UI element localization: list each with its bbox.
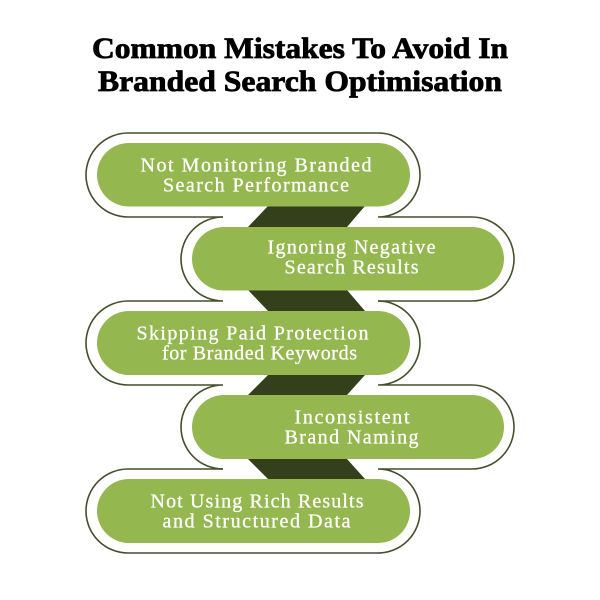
step 1: Not Monitoring Branded (140, 154, 372, 176)
title: Branded Search Optimisation (98, 65, 502, 98)
title: Common Mistakes To Avoid In (92, 32, 508, 65)
step 5: and Structured Data (162, 510, 351, 532)
step 5: Not Using Rich Results (150, 490, 364, 512)
step 2 (192, 227, 504, 290)
step 3: for Branded Keywords (162, 342, 357, 364)
connectors between steps (248, 206, 365, 479)
step 4: Brand Naming (284, 426, 418, 448)
step 2: Ignoring Negative (268, 236, 436, 258)
step 4: Inconsistent (294, 406, 410, 428)
title (92, 32, 508, 98)
step 4 (192, 395, 504, 459)
step 3 (97, 311, 410, 375)
step 1 (97, 143, 410, 206)
step 3: Skipping Paid Protection (136, 322, 368, 344)
step 1: Search Performance (163, 174, 349, 196)
snake outline (86, 133, 514, 553)
step 2: Search Results (284, 256, 419, 278)
step 5 (97, 479, 410, 543)
